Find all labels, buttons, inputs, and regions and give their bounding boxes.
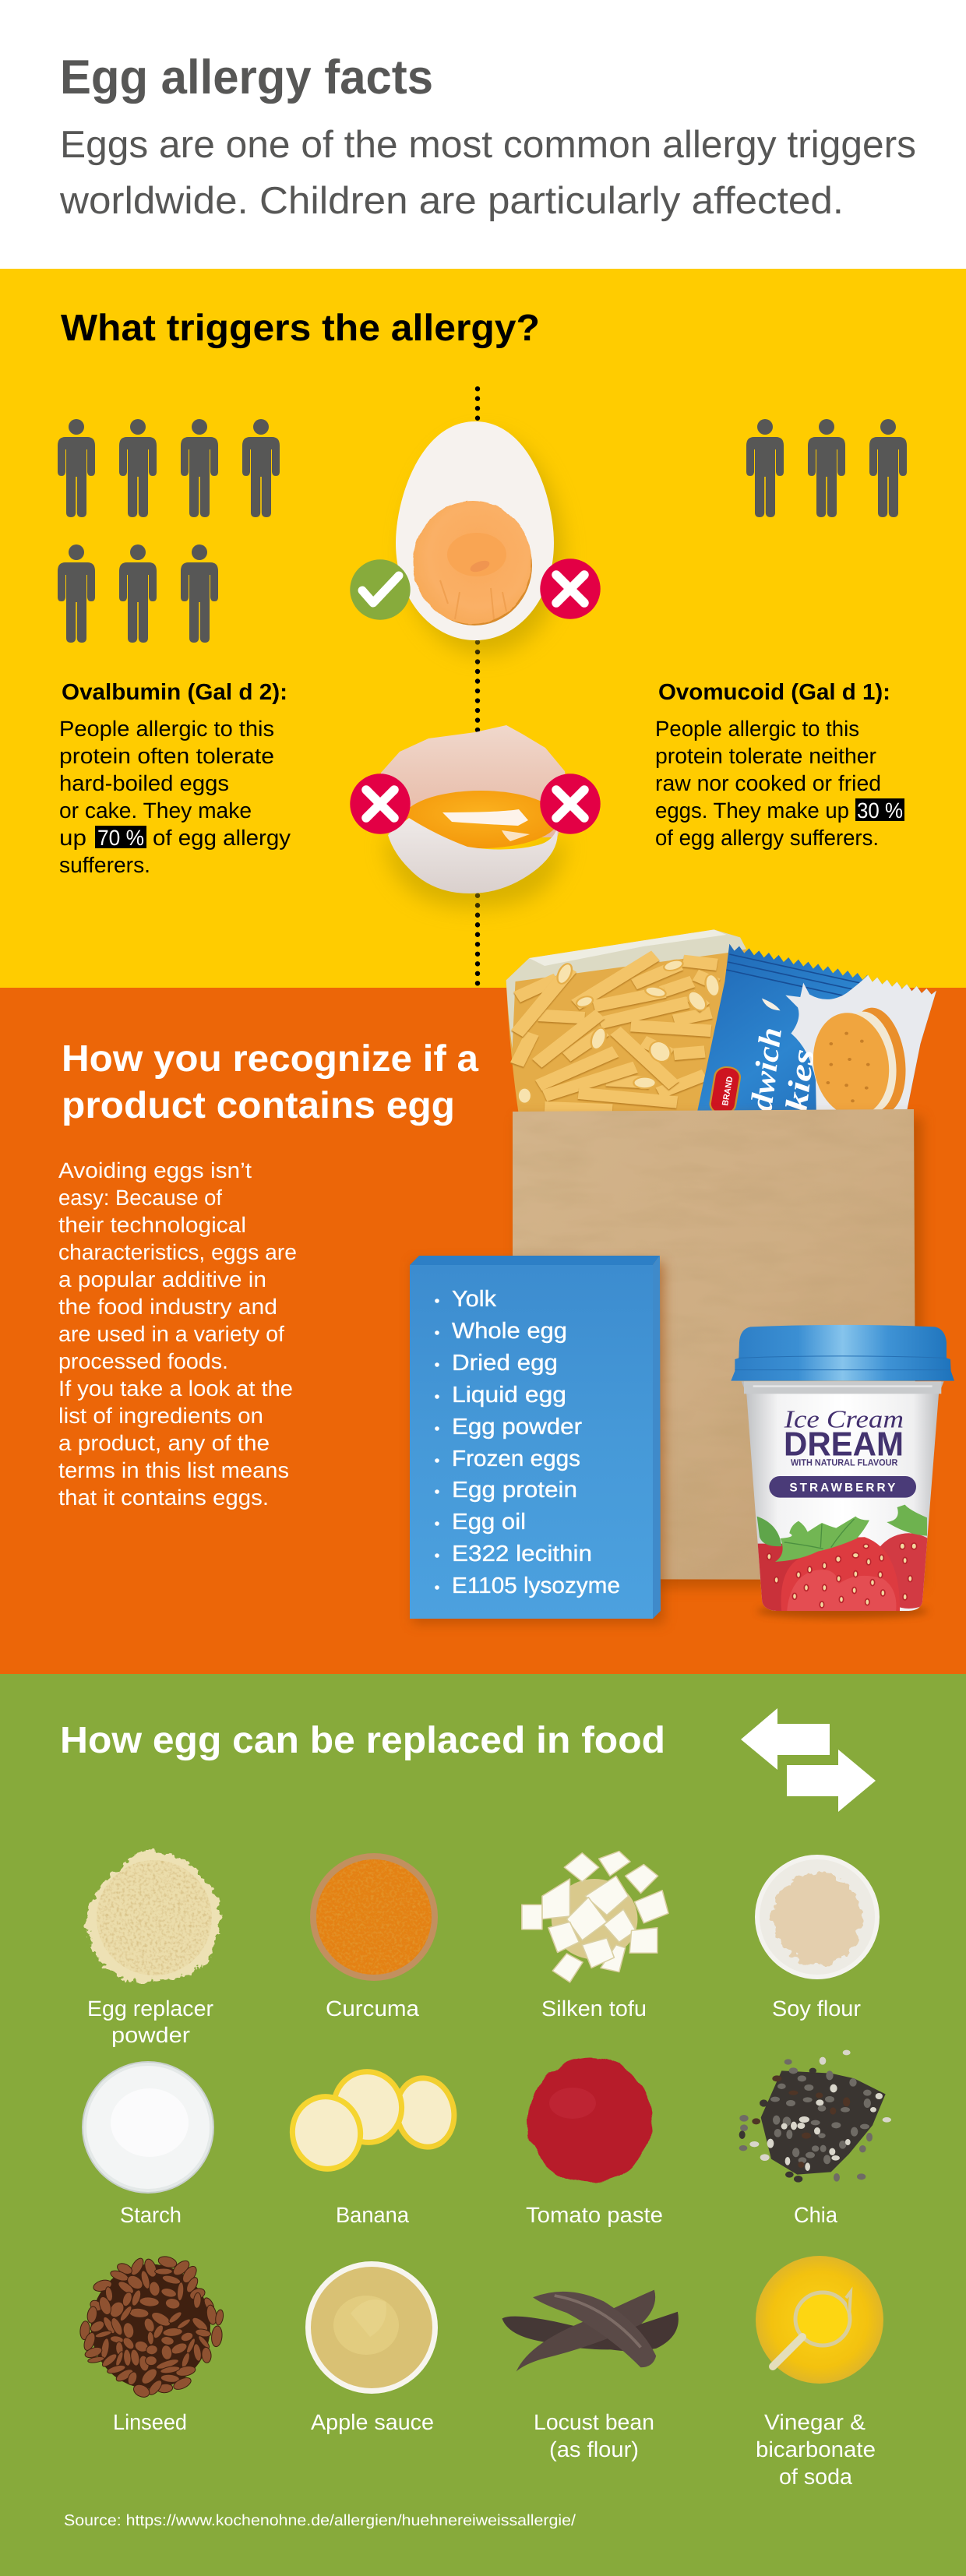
image: hard-boiled egg: [396, 421, 563, 654]
front shell: [388, 818, 558, 893]
label: Soy flour: [772, 1996, 861, 2021]
heading: What triggers the allergy?: [61, 308, 540, 349]
body: ovalbumin: protein often tolerate: [59, 744, 274, 768]
food: soy flour: [755, 1855, 880, 2021]
heading: [62, 1038, 478, 1126]
icon: swap arrows: [741, 1708, 876, 1812]
brand badge: [709, 1066, 742, 1115]
text block: ovomucoid: [655, 680, 904, 850]
label: Curcuma: [326, 1996, 419, 2021]
subtitle: Eggs are one of the most common allergy triggers: [60, 124, 916, 166]
body text: terms in this list means: [58, 1458, 289, 1482]
image: paper bag: [513, 1109, 922, 1588]
body: ovomucoid: of egg allergy sufferers.: [655, 826, 879, 850]
strawberry leaves: [757, 1517, 781, 1546]
ingredient terms: Dried egg: [452, 1351, 558, 1376]
label: of soda: [779, 2465, 852, 2489]
body: ovalbumin: hard-boiled eggs: [59, 771, 229, 795]
heading: product contains egg: [62, 1085, 455, 1126]
cup label: Ice Cream: [784, 1405, 904, 1433]
body: ovomucoid: protein tolerate neither: [655, 744, 876, 768]
label: Apple sauce: [311, 2410, 434, 2434]
body: ovalbumin: up: [59, 826, 86, 850]
seeds: [767, 2067, 883, 2171]
icon: cross on hard-boiled egg: [540, 559, 601, 619]
food: egg replacer powder: [86, 1850, 220, 2047]
ingredient terms: Egg oil: [452, 1510, 526, 1535]
cup body: [742, 1381, 944, 1611]
body text: characteristics, eggs are: [58, 1240, 297, 1264]
penne pieces: [516, 956, 717, 1110]
cup label: DREAM: [784, 1425, 904, 1463]
body: ovalbumin: or cake. They make: [59, 798, 252, 823]
heading: How egg can be replaced in food: [60, 1720, 665, 1761]
people icons: ovomucoid 30 percent: [746, 419, 907, 517]
body: ovomucoid: eggs. They make up: [655, 798, 849, 823]
milk splash and white wrapper: [785, 975, 936, 1112]
strawberry seeds: [767, 1543, 917, 1608]
ingredient terms: E322 lecithin: [452, 1542, 592, 1566]
panel: header: [0, 0, 966, 269]
food: curcuma: [310, 1853, 438, 2021]
seeds: [79, 2254, 224, 2399]
body: ovomucoid: People allergic to this: [655, 717, 859, 741]
ingredient terms: Egg protein: [452, 1478, 577, 1503]
body text: a popular additive in: [58, 1267, 266, 1292]
body text: [58, 1158, 297, 1510]
heading: How you recognize if a: [62, 1038, 478, 1080]
food: chia seeds: [739, 2050, 891, 2227]
ingredient terms: Liquid egg: [452, 1383, 566, 1408]
body text: that it contains eggs.: [58, 1485, 269, 1510]
penne openings: [518, 958, 721, 1104]
image: cookie pack: BRAND: [721, 1076, 735, 1107]
image: pasta bag: [506, 929, 746, 1112]
label: Banana: [336, 2203, 409, 2227]
pack lettering: dwich: [743, 1025, 788, 1113]
subtitle: [59, 124, 916, 222]
body: ovalbumin: [59, 717, 291, 877]
panel: how you recognize egg in a product: [0, 929, 966, 1674]
ingredient list box: [410, 1256, 664, 1623]
body: ovalbumin: People allergic to this: [59, 717, 274, 741]
label: bicarbonate: [756, 2437, 876, 2461]
label: Tomato paste: [526, 2203, 663, 2227]
stray seeds: [739, 2050, 891, 2183]
ingredient terms: E1105 lysozyme: [452, 1573, 620, 1598]
label: Starch: [120, 2203, 182, 2227]
food: silken tofu: [522, 1852, 668, 2021]
highlight: 30 percent: 30 %: [857, 798, 903, 823]
text block: ovalbumin: [59, 680, 291, 877]
sandwich cookie: [807, 1006, 911, 1119]
food: tomato paste: [526, 2058, 663, 2227]
label: Locust bean: [534, 2410, 654, 2434]
ingredient terms: [452, 1287, 620, 1598]
cup lid: [731, 1325, 954, 1381]
shell interior: [379, 725, 569, 837]
panel: how egg can be replaced: [0, 1674, 966, 2576]
food: linseed: [79, 2254, 224, 2434]
label: Chia: [794, 2203, 837, 2227]
food: apple sauce: [305, 2261, 438, 2434]
raw yolk: [403, 791, 559, 848]
ingredient terms: Frozen eggs: [452, 1447, 580, 1471]
body text: their technological: [58, 1213, 246, 1237]
strawberry artwork: [757, 1505, 927, 1611]
label: Vinegar &: [764, 2410, 866, 2434]
label: [756, 2410, 876, 2489]
bullets: [435, 1299, 439, 1590]
subtitle: worldwide. Children are particularly affected.: [59, 180, 844, 222]
icon: cross left of raw egg: [350, 774, 411, 834]
body: ovalbumin: of egg allergy: [153, 826, 291, 850]
image: cookie pack: [697, 944, 936, 1119]
body text: easy: Because of: [58, 1186, 222, 1210]
body text: list of ingredients on: [58, 1404, 263, 1428]
panel: what triggers the allergy: [0, 269, 966, 988]
body: ovalbumin: sufferers.: [59, 853, 150, 877]
body: ovomucoid: [655, 717, 904, 850]
ingredient terms: Yolk: [452, 1287, 497, 1312]
highlight: 70 percent: 70 %: [97, 826, 144, 850]
body text: are used in a variety of: [58, 1322, 284, 1346]
image: cracked raw egg: [379, 725, 569, 907]
body: ovomucoid: raw nor cooked or fried: [655, 771, 881, 795]
body text: a product, any of the: [58, 1431, 270, 1455]
image: ice cream cup: [731, 1325, 954, 1619]
label: Egg replacer: [87, 1996, 213, 2021]
body text: If you take a look at the: [58, 1376, 293, 1401]
people icons: ovalbumin 70 percent: [58, 419, 280, 643]
label: Silken tofu: [541, 1996, 647, 2021]
body text: processed foods.: [58, 1349, 228, 1373]
food: locust bean: [502, 2290, 679, 2461]
icon: cross right of raw egg: [540, 774, 601, 834]
source line: Source: https://www.kochenohne.de/allergien/huehnereiweissallergie/: [64, 2512, 576, 2529]
cup label: WITH NATURAL FLAVOUR: [791, 1457, 897, 1468]
subheading: ovalbumin: Ovalbumin (Gal d 2):: [62, 680, 287, 705]
image: cookie pack: kies: [778, 1047, 821, 1113]
dotted divider line: [475, 389, 480, 988]
ingredient terms: Egg powder: [452, 1415, 582, 1440]
cup label: STRAWBERRY: [789, 1480, 895, 1494]
label: [534, 2410, 654, 2461]
yolk: [413, 501, 532, 625]
cup label: [769, 1405, 916, 1498]
label: powder: [111, 2023, 190, 2047]
ingredient terms: Whole egg: [452, 1319, 567, 1344]
label: (as flour): [549, 2437, 639, 2461]
body text: Avoiding eggs isn’t: [58, 1158, 252, 1182]
label: Linseed: [113, 2410, 187, 2434]
subheading: ovomucoid: Ovomucoid (Gal d 1):: [658, 680, 890, 705]
food: banana: [283, 2062, 464, 2227]
body text: the food industry and: [58, 1295, 277, 1319]
food: starch: [83, 2062, 213, 2227]
label: [87, 1996, 213, 2047]
icon: tick on hard-boiled egg: [350, 559, 411, 620]
title: Egg allergy facts: [60, 51, 433, 104]
food: vinegar and bicarbonate: [756, 2256, 883, 2489]
